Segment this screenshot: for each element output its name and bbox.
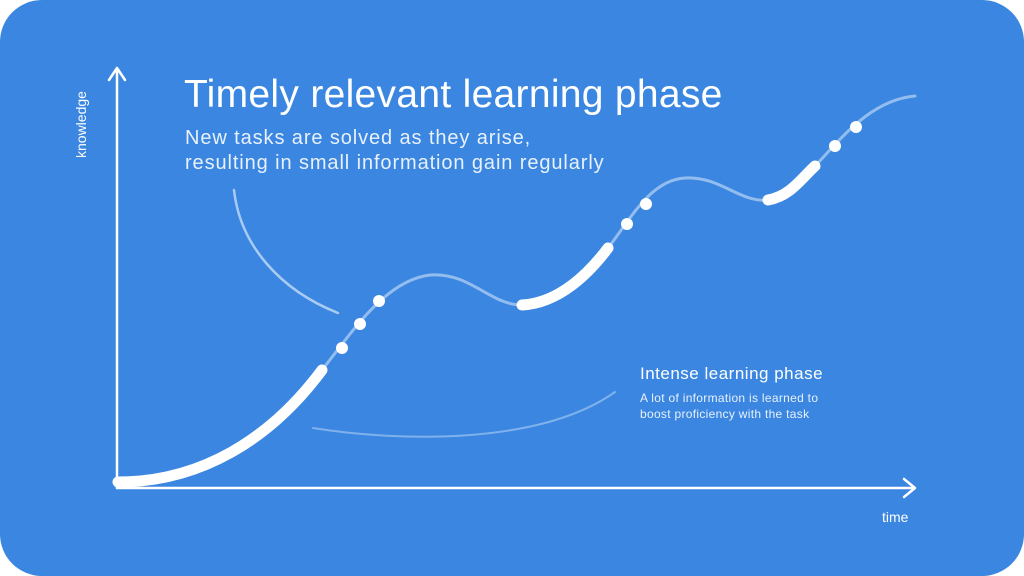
subtitle [185, 127, 605, 174]
callout: intense learning phase: A lot of information is learned to [640, 391, 818, 405]
callout: intense learning phase [640, 364, 823, 421]
leader line: timely phase [234, 190, 338, 313]
thick segments: intense learning [118, 166, 815, 482]
leader line: intense phase [313, 392, 615, 437]
callout: intense learning phase: Intense learning phase [640, 364, 823, 383]
axis label: knowledge: knowledge [73, 91, 89, 158]
title: Timely relevant learning phase [184, 73, 723, 116]
learning curve (thin) [322, 96, 915, 370]
axis: x [117, 479, 915, 497]
axis label: time: time [882, 509, 908, 525]
subtitle: resulting in small information gain regularly [185, 152, 605, 174]
axis: y [109, 68, 125, 488]
callout: intense learning phase: boost proficiency with the task [640, 407, 809, 421]
dots: timely learning [336, 121, 862, 354]
subtitle: New tasks are solved as they arise, [185, 127, 531, 149]
